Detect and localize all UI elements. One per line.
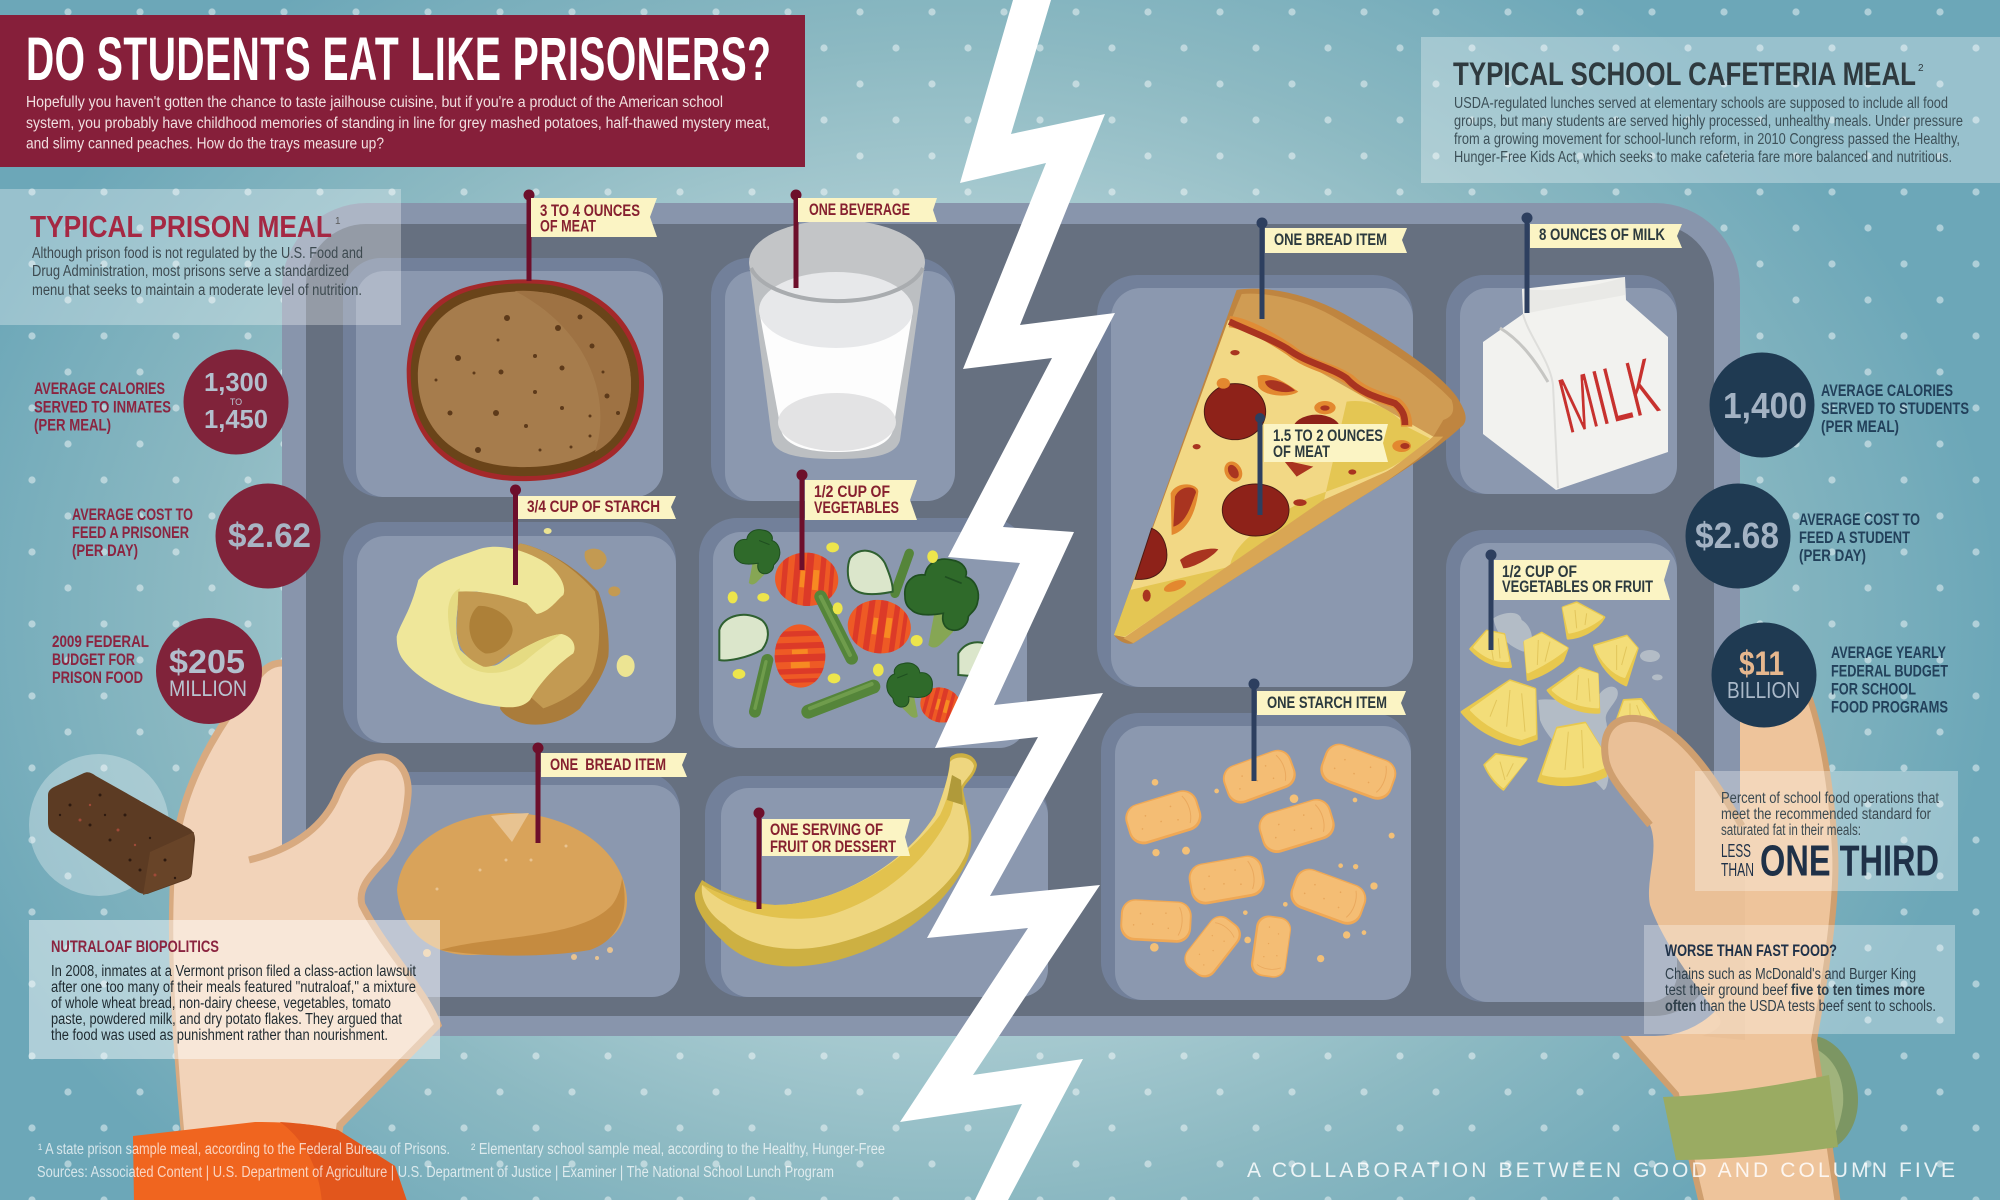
stat: prison cost: FEED A PRISONER bbox=[72, 524, 189, 542]
panel: saturated fat callout bbox=[1695, 771, 1958, 891]
right hand: wrist and fingers behind tray bbox=[1619, 650, 1838, 1200]
flag: one serving of fruit or dessert bbox=[754, 808, 910, 909]
footnote mark: 1 bbox=[335, 216, 341, 227]
flag: 3/4 cup of starch bbox=[510, 484, 676, 585]
stat: school food budget: FOOD PROGRAMS bbox=[1831, 698, 1948, 716]
flag: 8 ounces of milk: 8 OUNCES OF MILK bbox=[1539, 226, 1665, 244]
food: milk carton bbox=[1483, 277, 1668, 490]
compartment: fruit or dessert bbox=[705, 776, 1048, 997]
footnotes and sources bbox=[37, 1141, 885, 1181]
flag: one beverage bbox=[790, 190, 937, 288]
title: DO STUDENTS EAT LIKE PRISONERS? bbox=[26, 25, 771, 93]
flag: 1.5 to 2 ounces of meat bbox=[1255, 413, 1388, 515]
stat: school food budget: BILLION bbox=[1727, 677, 1800, 703]
stat: prison budget: MILLION bbox=[169, 676, 247, 701]
heading: NUTRALOAF BIOPOLITICS bbox=[51, 938, 219, 956]
panel: saturated fat callout: saturated fat in their meals: bbox=[1721, 822, 1861, 839]
stat: prison cost: (PER DAY) bbox=[72, 542, 138, 560]
description bbox=[1454, 95, 1963, 166]
flag: 1.5 to 2 ounces of meat: 1.5 TO 2 OUNCES bbox=[1273, 427, 1383, 445]
right hand: wristband bbox=[1663, 1075, 1838, 1160]
panel: saturated fat callout: meet the recommended standard for bbox=[1721, 806, 1931, 823]
body: In 2008, inmates at a Vermont prison filed a class-action lawsuit bbox=[51, 963, 417, 980]
stat: student cost bbox=[1686, 484, 1920, 588]
lightning divider bbox=[900, 0, 1115, 1200]
stat: school food budget: AVERAGE YEARLY bbox=[1831, 644, 1946, 662]
milk label: MILK bbox=[1551, 341, 1666, 450]
stat: prison cost: AVERAGE COST TO bbox=[72, 506, 193, 524]
stat: student cost: AVERAGE COST TO bbox=[1799, 511, 1920, 529]
panel: saturated fat callout: Percent of school food operations that bbox=[1721, 790, 1940, 807]
body: after one too many of their meals featured "nutraloaf," a mixture bbox=[51, 979, 416, 996]
left hand: fingers behind tray bbox=[172, 663, 295, 1140]
body: Chains such as McDonald's and Burger King bbox=[1665, 966, 1916, 983]
credit line: A COLLABORATION BETWEEN GOOD AND COLUMN FIVE bbox=[1247, 1159, 1955, 1182]
stat: prison calories: TO bbox=[230, 397, 242, 407]
right hand: wristband back bbox=[1815, 1036, 1858, 1152]
stat: prison cost bbox=[72, 484, 320, 588]
intro text: system, you probably have childhood memories of standing in line for grey mashed potatoes, half-thawed mystery meat, bbox=[26, 115, 770, 132]
title banner bbox=[0, 15, 805, 167]
corn bbox=[728, 542, 938, 683]
flag: one beverage: ONE BEVERAGE bbox=[809, 201, 910, 219]
flag: 8 ounces of milk bbox=[1522, 212, 1682, 313]
stat: student calories: AVERAGE CALORIES bbox=[1821, 382, 1953, 400]
stat: prison budget bbox=[52, 618, 262, 724]
body: paste, powdered milk, and dry potato flakes. They argued that bbox=[51, 1011, 403, 1028]
flag: 3 to 4 ounces of meat: OF MEAT bbox=[540, 218, 596, 236]
flag: 1.5 to 2 ounces of meat: OF MEAT bbox=[1273, 443, 1330, 461]
icon: nutraloaf bbox=[29, 754, 195, 896]
intro text: and slimy canned peaches. How do the trays measure up? bbox=[26, 136, 384, 152]
stat: student cost: FEED A STUDENT bbox=[1799, 529, 1910, 547]
flag: one starch item bbox=[1248, 678, 1406, 781]
compartment: milk bbox=[1446, 275, 1677, 494]
body: often than the USDA tests beef sent to schools. bbox=[1665, 998, 1936, 1015]
stat: student cost: (PER DAY) bbox=[1799, 547, 1866, 565]
footnotes and sources: Sources: Associated Content | U.S. Department of Agriculture | U.S. Department of Justice | Examiner | The National School Lunch Program bbox=[37, 1164, 834, 1181]
compartment: tots bbox=[1101, 713, 1411, 1000]
flag: 1/2 cup of vegetables bbox=[796, 470, 917, 570]
left hand: thumb and palm over tray bbox=[173, 757, 438, 1140]
panel: nutraloaf biopolitics bbox=[29, 920, 440, 1059]
compartment: beverage bbox=[711, 258, 955, 501]
compartment: pizza bbox=[1097, 275, 1413, 687]
flag: one bread item: ONE BREAD ITEM bbox=[550, 756, 666, 774]
stat: prison calories: (PER MEAL) bbox=[34, 416, 111, 434]
compartment: meat bbox=[343, 258, 663, 497]
flag: 1/2 cup of vegetables: VEGETABLES bbox=[814, 499, 899, 517]
stat: prison cost: $2.62 bbox=[228, 517, 311, 555]
intro text bbox=[26, 94, 770, 152]
description bbox=[32, 245, 363, 299]
flag: 1/2 cup of vegetables or fruit: 1/2 CUP OF bbox=[1502, 563, 1577, 581]
body: the food was used as punishment rather than nourishment. bbox=[51, 1027, 388, 1044]
stat: school food budget bbox=[1712, 622, 1948, 728]
intro text: Hopefully you haven't gotten the chance to taste jailhouse cuisine, but if you're a product of the American school bbox=[26, 94, 723, 111]
compartment: starch bbox=[343, 522, 676, 743]
food: pineapple bbox=[1462, 603, 1663, 790]
flag: 1/2 cup of vegetables or fruit: VEGETABLES OR FRUIT bbox=[1502, 578, 1653, 596]
pepperoni bbox=[1204, 384, 1266, 440]
panel: typical school cafeteria meal bbox=[1421, 37, 2000, 183]
flag: 3 to 4 ounces of meat bbox=[524, 190, 657, 281]
stat: prison budget: PRISON FOOD bbox=[52, 669, 143, 687]
description: Although prison food is not regulated by the U.S. Food and bbox=[32, 245, 363, 262]
compartment: vegetables bbox=[699, 518, 1027, 748]
stat: school food budget: $11 bbox=[1739, 645, 1784, 683]
stat: prison calories: AVERAGE CALORIES bbox=[34, 380, 165, 398]
panel: worse than fast food bbox=[1644, 925, 1955, 1034]
flag: 1/2 cup of vegetables: 1/2 CUP OF bbox=[814, 483, 890, 501]
panel: saturated fat callout: THAN bbox=[1721, 860, 1754, 880]
stat: prison budget: 2009 FEDERAL bbox=[52, 633, 149, 651]
beans bbox=[755, 553, 909, 712]
right hand: thumb over tray bbox=[1605, 718, 1745, 1040]
stat: student calories: (PER MEAL) bbox=[1821, 418, 1899, 436]
description: menu that seeks to maintain a moderate level of nutrition. bbox=[32, 282, 362, 299]
stat: prison calories: 1,450 bbox=[204, 404, 268, 434]
compartment: pineapple bbox=[1446, 530, 1677, 1002]
body bbox=[1665, 966, 1936, 1015]
food: pizza bbox=[1114, 289, 1466, 644]
flag: one bread item (school): ONE BREAD ITEM bbox=[1274, 231, 1387, 249]
description: Drug Administration, most prisons serve a standardized bbox=[32, 263, 349, 280]
flag: 1/2 cup of vegetables or fruit bbox=[1486, 550, 1670, 650]
food: tater tots bbox=[1119, 739, 1400, 982]
food: glass of milk bbox=[749, 220, 925, 459]
flag: one starch item: ONE STARCH ITEM bbox=[1267, 694, 1387, 712]
flag: one serving of fruit or dessert: ONE SERVING OF bbox=[770, 821, 883, 839]
food: bread roll bbox=[397, 813, 627, 960]
flag: 3 to 4 ounces of meat: 3 TO 4 OUNCES bbox=[540, 202, 640, 220]
flag: one bread item bbox=[532, 742, 687, 843]
stat: prison budget: BUDGET FOR bbox=[52, 651, 135, 669]
stat: school food budget: FEDERAL BUDGET bbox=[1831, 662, 1948, 680]
panel: typical prison meal bbox=[0, 189, 401, 325]
body: of whole wheat bread, non-dairy cheese, vegetables, tomato bbox=[51, 995, 391, 1012]
flag: 3/4 cup of starch: 3/4 CUP OF STARCH bbox=[527, 498, 660, 516]
body: test their ground beef five to ten times more bbox=[1665, 982, 1925, 999]
stat: student calories: 1,400 bbox=[1723, 385, 1807, 426]
body bbox=[51, 963, 417, 1044]
lunch tray bbox=[282, 203, 1740, 1036]
food: mashed potatoes bbox=[397, 528, 635, 725]
footnotes and sources: ² Elementary school sample meal, according to the Healthy, Hunger-Free bbox=[471, 1141, 885, 1158]
footnotes and sources: ¹ A state prison sample meal, according to the Federal Bureau of Prisons. bbox=[38, 1141, 450, 1158]
stat: student calories bbox=[1710, 352, 1969, 458]
stat: prison calories: SERVED TO INMATES bbox=[34, 398, 171, 416]
stat: school food budget: FOR SCHOOL bbox=[1831, 680, 1916, 698]
food: vegetables bbox=[719, 530, 990, 729]
heading: WORSE THAN FAST FOOD? bbox=[1665, 942, 1837, 960]
panel: saturated fat callout: LESS bbox=[1721, 841, 1751, 861]
heading: TYPICAL PRISON MEAL bbox=[30, 210, 332, 244]
orange prison sleeve bbox=[133, 1122, 408, 1200]
turnips bbox=[719, 551, 990, 677]
big number: ONE THIRD bbox=[1760, 836, 1939, 886]
compartment: bread bbox=[344, 772, 680, 997]
flag: one serving of fruit or dessert: FRUIT OR DESSERT bbox=[770, 838, 896, 856]
stat: prison calories: 1,300 bbox=[204, 367, 268, 397]
food: banana bbox=[695, 753, 977, 966]
flag: one bread item (school) bbox=[1256, 218, 1407, 319]
food: meat patty bbox=[407, 279, 644, 481]
footnote mark: 2 bbox=[1918, 63, 1924, 74]
stat: prison budget: $205 bbox=[169, 643, 245, 680]
stat: prison calories bbox=[34, 350, 288, 454]
stat: student cost: $2.68 bbox=[1695, 515, 1779, 556]
